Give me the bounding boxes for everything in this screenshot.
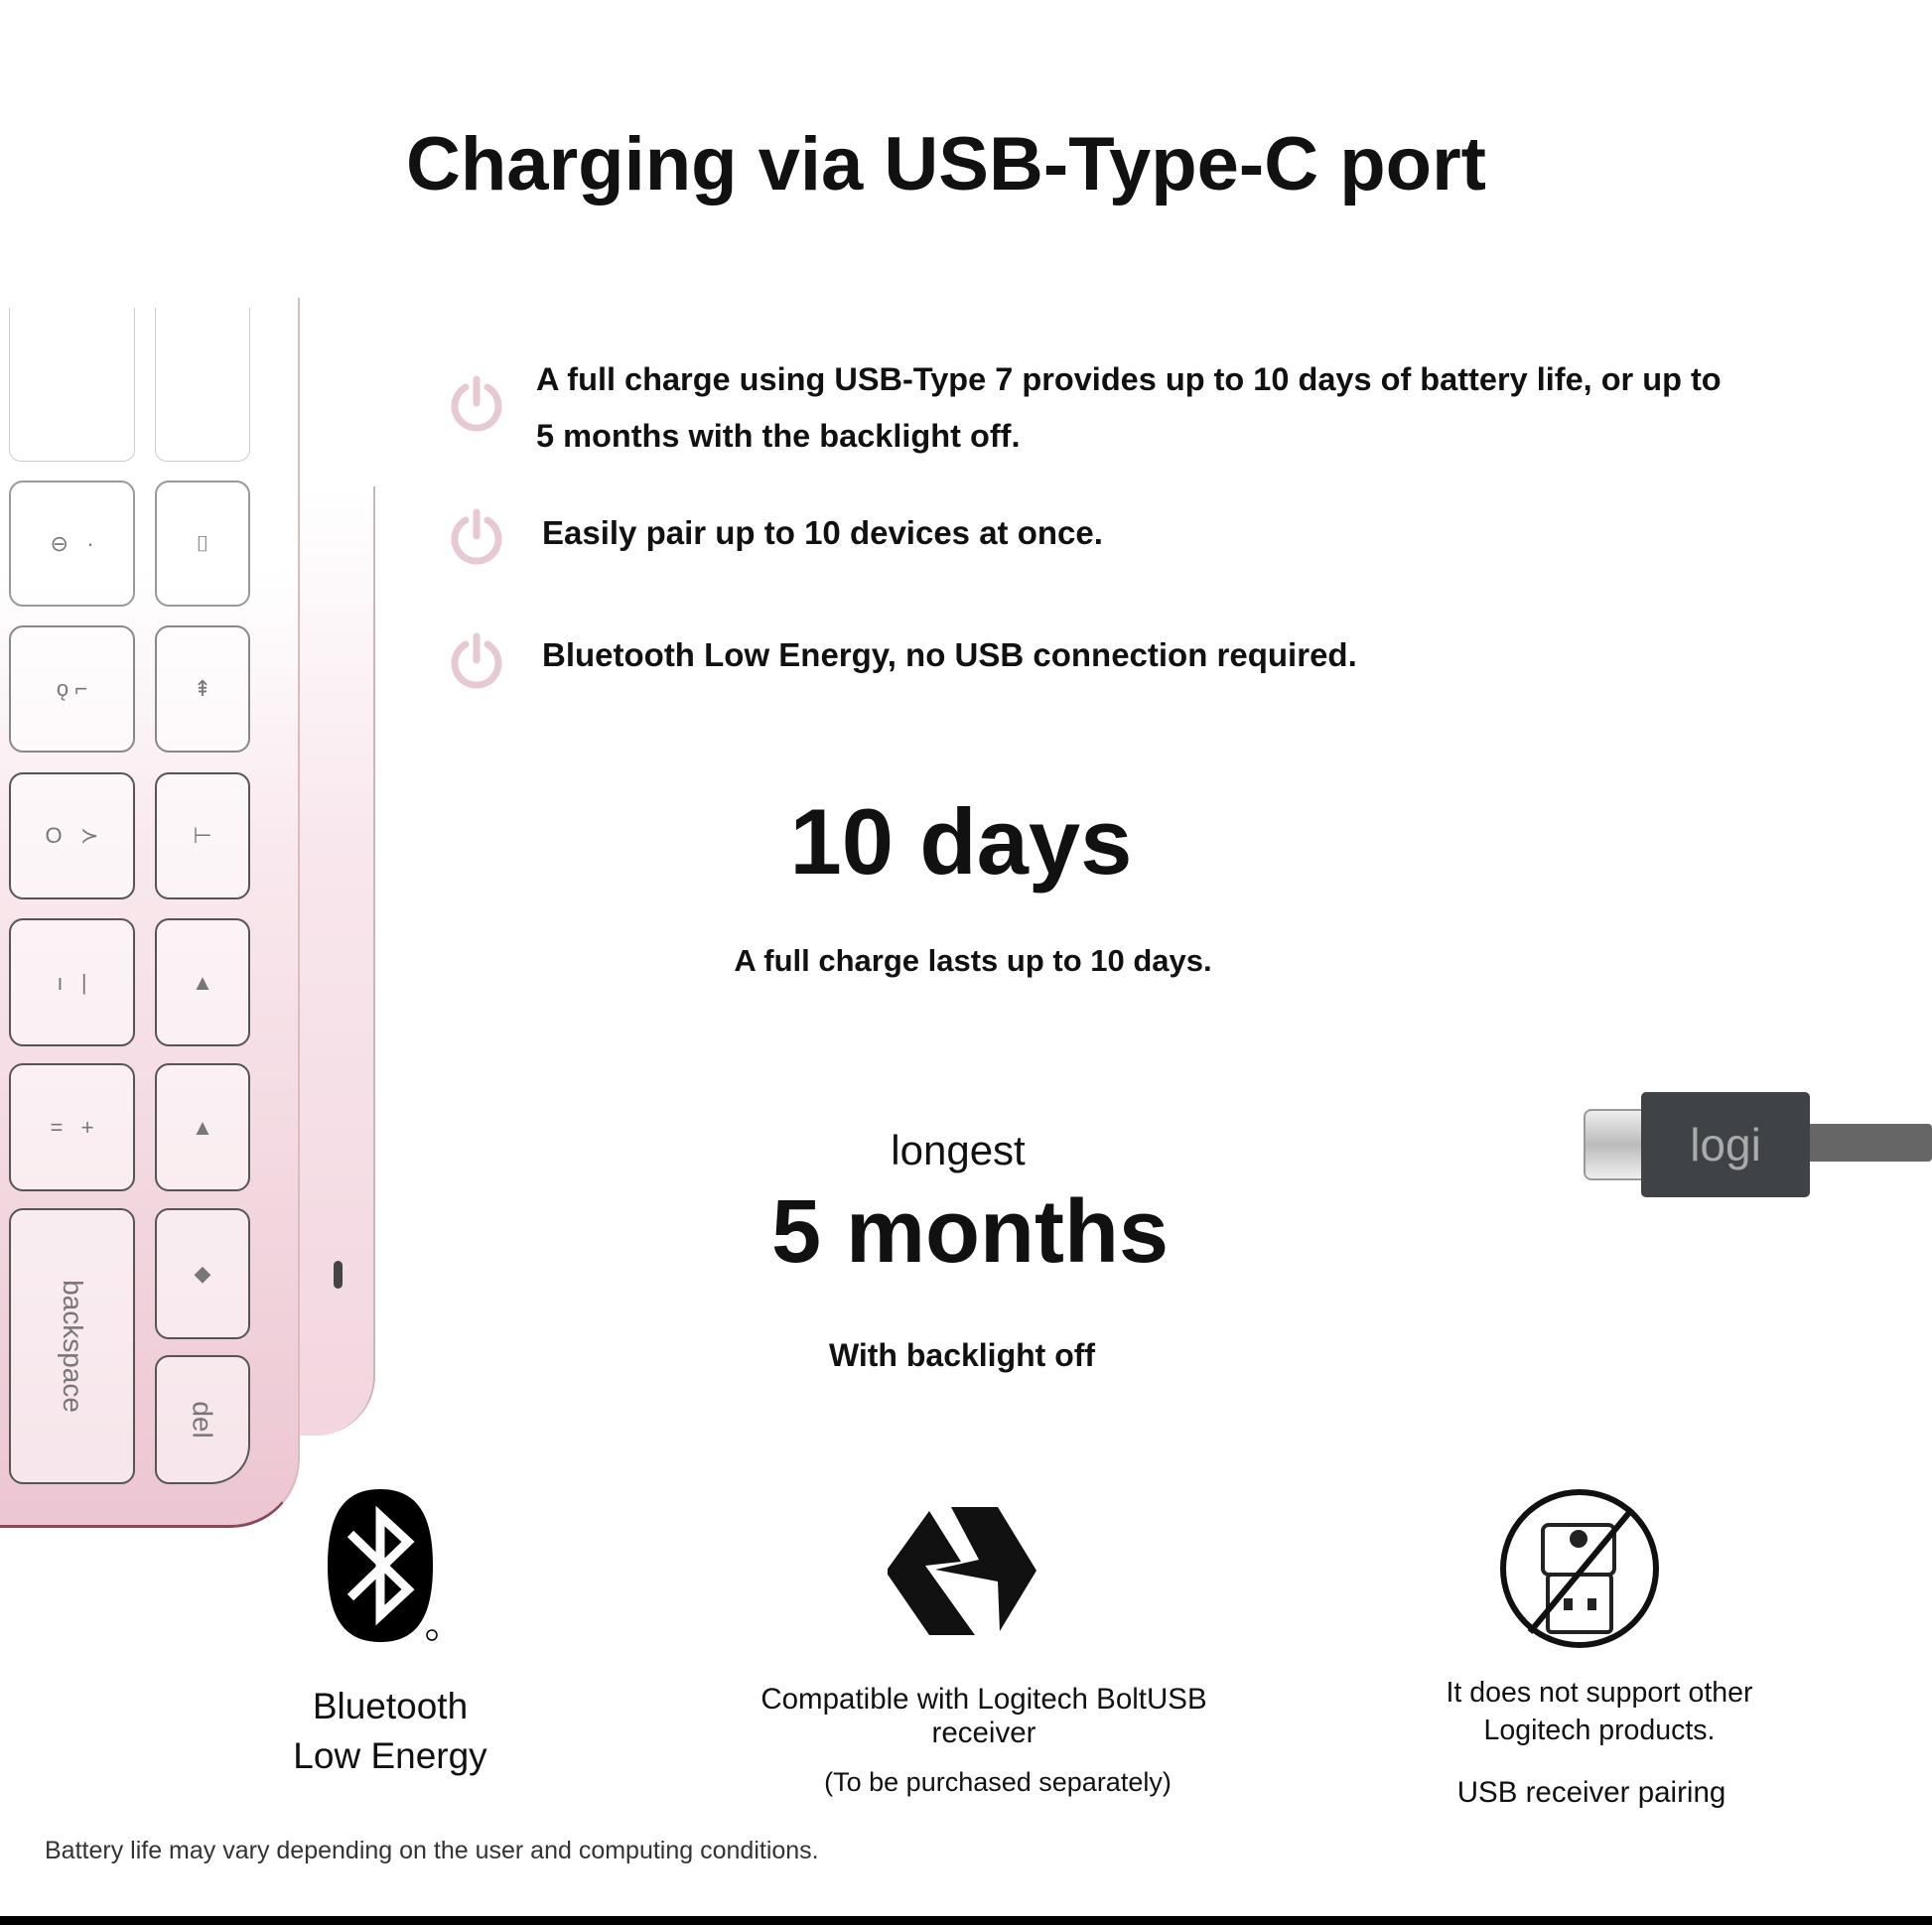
keyboard image: backspace bbox=[58, 1280, 87, 1413]
usb-c cable bbox=[1584, 1092, 1932, 1197]
text 3: Bluetooth Low Energy, no USB connection required. bbox=[542, 636, 1357, 673]
keys: ⊖ · bbox=[50, 530, 94, 556]
stat: 10 days: A full charge lasts up to 10 days. bbox=[734, 943, 1212, 978]
keys bbox=[9, 481, 135, 607]
icon: power 3 bbox=[451, 633, 502, 689]
top blank keys bbox=[9, 308, 135, 462]
stat: 5 months: 5 months bbox=[771, 1182, 1169, 1282]
stat: 5 months: With backlight off bbox=[829, 1337, 1095, 1373]
text: bluetooth: Low Energy bbox=[293, 1735, 487, 1776]
footnote: Battery life may vary depending on the user and computing conditions. bbox=[45, 1837, 819, 1864]
keyboard image: ǫ ⌐ bbox=[57, 676, 87, 701]
main plate bbox=[0, 298, 300, 1528]
text 1: 5 months with the backlight off. bbox=[536, 418, 1021, 454]
keyboard image: ▲ bbox=[192, 1114, 213, 1140]
led bbox=[334, 1261, 343, 1289]
keyboard image: ⇞ bbox=[194, 676, 211, 701]
text 1 bbox=[536, 361, 1722, 454]
keyboard image: ⌷ bbox=[196, 530, 209, 556]
keyboard image: = + bbox=[50, 1114, 94, 1140]
stat: 5 months: longest bbox=[891, 1127, 1026, 1173]
icon: no usb bbox=[1500, 1489, 1659, 1648]
usb-c cable: logi bbox=[1690, 1119, 1761, 1170]
keyboard image: ▲ bbox=[192, 969, 213, 995]
text: USB receiver pairing bbox=[1457, 1776, 1725, 1809]
text 2: Easily pair up to 10 devices at once. bbox=[542, 514, 1103, 551]
side panel bbox=[288, 486, 375, 1436]
icon: power 2 bbox=[451, 508, 502, 564]
text: bluetooth bbox=[293, 1686, 487, 1776]
text: bluetooth: Bluetooth bbox=[313, 1686, 468, 1726]
stat: 5 months bbox=[771, 1127, 1169, 1373]
text: bolt bbox=[760, 1683, 1207, 1749]
text 1: A full charge using USB-Type 7 provides up to 10 days of battery life, or up to bbox=[536, 361, 1722, 397]
keyboard image bbox=[0, 298, 375, 1528]
keyboard image: ⊢ bbox=[193, 823, 212, 848]
icon: bolt bbox=[888, 1507, 1036, 1635]
bullet list bbox=[451, 361, 1722, 689]
keyboard image: del bbox=[188, 1401, 218, 1439]
keyboard image: ◆ bbox=[195, 1261, 210, 1286]
text: bolt: receiver bbox=[932, 1717, 1035, 1749]
stat: 10 days: 10 days bbox=[790, 789, 1132, 894]
icon: bluetooth bbox=[328, 1489, 438, 1642]
bottom bar bbox=[0, 1916, 1932, 1925]
text: (To be purchased separately) bbox=[824, 1767, 1172, 1797]
title: Charging via USB-Type-C port bbox=[406, 122, 1486, 206]
stat: 10 days bbox=[734, 789, 1212, 978]
keyboard image: ı | bbox=[57, 969, 87, 995]
icon: power 1 bbox=[451, 375, 502, 431]
text: no usb: It does not support other bbox=[1447, 1677, 1752, 1709]
text: bolt: Compatible with Logitech BoltUSB bbox=[760, 1683, 1207, 1716]
text: no usb bbox=[1447, 1677, 1752, 1746]
keyboard image: O ≻ bbox=[46, 823, 98, 848]
text: no usb: Logitech products. bbox=[1484, 1715, 1715, 1746]
